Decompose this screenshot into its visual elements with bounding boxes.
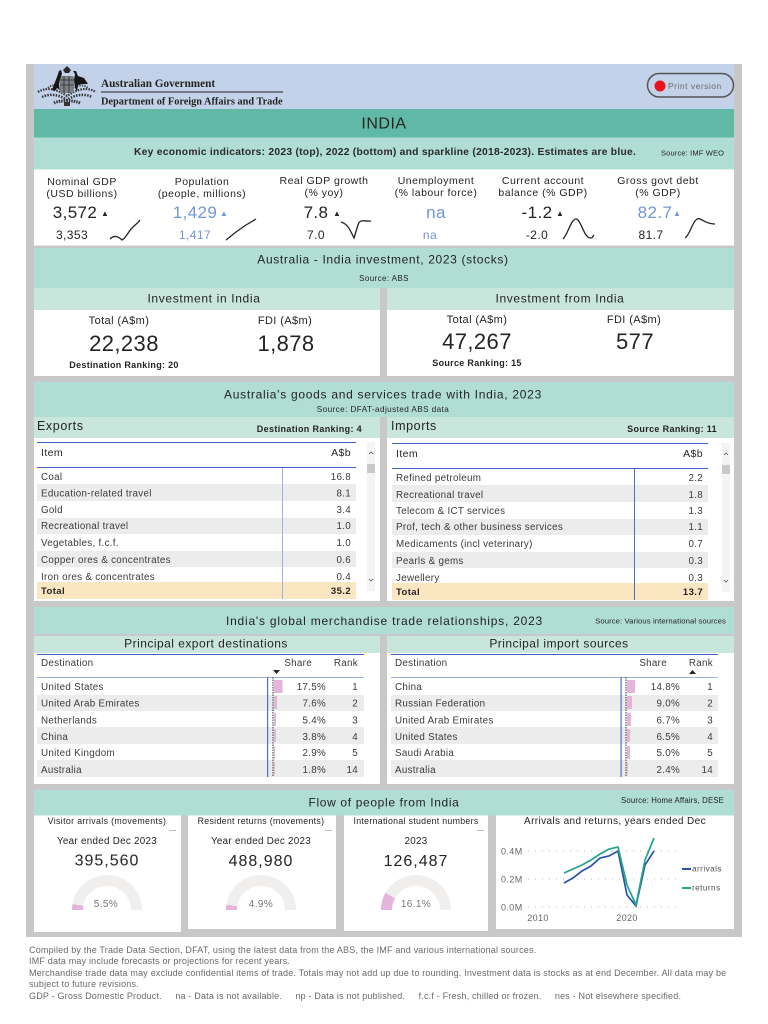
gauge: 4.9% [249, 899, 273, 910]
panel: imports: Medicaments (incl veterinary) [396, 539, 533, 550]
indicator: current account balance: -1.2 [522, 203, 552, 222]
panel: principal export destinations: 1 [352, 682, 358, 693]
card: international students [344, 816, 488, 931]
indicator: population: ▲ [220, 209, 228, 218]
panel: principal import sources: 9.0% [656, 698, 680, 710]
panel: principal export destinations: 3 [352, 716, 358, 726]
panel: principal import sources: Australia [395, 765, 436, 776]
header banner [34, 64, 734, 109]
panel: principal import sources: United States [395, 732, 458, 743]
indicator: gross govt debt: ▲ [673, 209, 681, 218]
panel: principal export destinations: United Arab Emirates [41, 698, 140, 710]
panel: imports: Prof, tech & other business services [396, 522, 563, 533]
card: resident returns: 488,980 [229, 853, 293, 870]
goods and services heading [34, 382, 734, 417]
panel: imports: 13.7 [683, 587, 703, 598]
footnotes: GDP - Gross Domestic Product. na - Data is not available. np - Data is not published. f.c.f - Fresh, chilled or frozen. nes - Not elsewhere specified. [29, 991, 681, 1001]
panel: exports: Gold [41, 505, 63, 516]
panel: principal import sources: 6.7% [656, 716, 680, 726]
indicator: population: (people, millions) [158, 188, 246, 200]
panel: investment in India: Investment in India [147, 292, 261, 306]
panel: investment in India [34, 288, 380, 376]
merchandise trade heading [34, 607, 734, 634]
panel: principal import sources [387, 636, 734, 784]
panel: imports: 1.1 [688, 522, 703, 533]
panel: arrivals and returns line chart [496, 816, 734, 929]
panel: investment in India: Total (A$m) [89, 315, 149, 327]
scrollbar [722, 443, 730, 592]
panel: imports [387, 417, 734, 601]
panel: principal export destinations: 17.5% [297, 682, 326, 693]
panel: principal export destinations: United States [41, 682, 104, 693]
indicator: unemployment [395, 175, 477, 242]
footnotes: Merchandise trade data may exclude confidential items of trade. Totals may not add up due to rounding. Investment data is stocks as at end December. All data may be [29, 968, 726, 978]
panel: investment from India: Investment from India [495, 292, 625, 306]
panel: arrivals and returns line chart: 0.4M [501, 846, 523, 856]
panel: principal import sources: 2 [707, 698, 713, 710]
panel: principal import sources: China [395, 682, 422, 693]
panel: principal import sources: Russian Federation [395, 698, 485, 710]
panel: exports: 3.4 [336, 505, 351, 516]
card: resident returns: Resident returns (movements) [198, 816, 324, 826]
line: arrivals [564, 851, 654, 906]
panel: exports: 16.8 [331, 472, 351, 483]
panel: key indicators [34, 170, 734, 246]
gauge [78, 880, 136, 910]
indicator: real GDP growth: (% yoy) [304, 187, 344, 199]
panel: principal export destinations: 3.8% [302, 732, 326, 743]
panel: principal import sources: 4 [707, 732, 713, 743]
panel: principal export destinations [34, 636, 380, 784]
panel: imports: Jewellery [396, 573, 440, 584]
panel: principal import sources: 2.4% [656, 765, 680, 776]
key indicators heading: Key economic indicators: 2023 (top), 2022 (bottom) and sparkline (2018-2023). Estimates are blue. [134, 147, 636, 158]
indicator: gross govt debt: Gross govt debt [617, 175, 699, 187]
page background panel [26, 64, 742, 937]
panel: investment from India: 577 [616, 329, 654, 354]
indicator: real GDP growth: 7.8 [304, 203, 328, 222]
key indicators heading [34, 138, 734, 170]
merchandise trade heading: Source: Various international sources [595, 616, 726, 626]
panel: principal export destinations: Netherlands [41, 716, 97, 726]
indicator: nominal GDP [46, 176, 140, 242]
department name: Australian Government [101, 78, 215, 90]
flow of people heading: Flow of people from India [308, 796, 460, 810]
panel: principal export destinations: 5.4% [302, 716, 326, 726]
indicator: nominal GDP: Nominal GDP [47, 176, 117, 188]
footnotes: Compiled by the Trade Data Section, DFAT, using the latest data from the ABS, the IMF and various international sources. [29, 945, 536, 955]
panel: exports: 1.0 [336, 538, 351, 549]
panel: exports: 1.0 [336, 521, 351, 532]
panel: principal import sources: 14 [702, 765, 713, 776]
panel: imports: Pearls & gems [396, 556, 464, 567]
panel: principal export destinations: Share [284, 658, 312, 669]
panel: exports: Recreational travel [41, 521, 128, 532]
footnotes: IMF data may include forecasts or projections for recent years. [29, 956, 290, 966]
flow of people heading [34, 790, 734, 816]
investment heading: Source: ABS [359, 274, 409, 283]
print version button: Print version [668, 81, 722, 91]
gauge: 5.5% [94, 899, 118, 910]
investment heading: Australia - India investment, 2023 (stocks) [257, 252, 509, 266]
indicator: nominal GDP: ▲ [101, 209, 109, 218]
panel: arrivals and returns line chart: 2010 [527, 913, 549, 923]
title: India [34, 109, 734, 138]
card: visitor arrivals: 395,560 [75, 852, 139, 870]
footnotes [29, 945, 726, 1001]
panel: imports: 0.7 [688, 539, 703, 550]
share bars [620, 677, 635, 777]
panel: principal export destinations: 2 [352, 698, 358, 710]
indicator: nominal GDP: 3,572 [53, 203, 97, 222]
panel: exports: Item [41, 447, 63, 459]
indicator: current account balance: balance (% GDP) [498, 187, 588, 199]
department name [101, 78, 283, 108]
panel: exports: 35.2 [331, 586, 351, 597]
panel: principal import sources: 5.0% [656, 748, 680, 759]
share bars [267, 677, 282, 777]
panel: imports: A$b [683, 448, 703, 460]
card: resident returns [188, 816, 336, 929]
panel: imports: Refined petroleum [396, 473, 481, 484]
goods and services heading: Source: DFAT-adjusted ABS data [317, 405, 449, 414]
indicator: gross govt debt: 81.7 [639, 228, 663, 242]
panel: principal export destinations: 1.8% [302, 765, 326, 776]
panel: principal import sources: Destination [395, 658, 447, 669]
card: international students: 126,487 [384, 853, 448, 870]
panel: principal export destinations: Australia [41, 765, 82, 776]
gauge [386, 880, 446, 910]
indicator: population [158, 176, 256, 242]
panel: principal export destinations: Rank [334, 658, 358, 669]
panel: investment in India: Destination Ranking: 20 [69, 360, 179, 370]
panel: arrivals and returns line chart: Arrivals and returns, years ended Dec [524, 816, 706, 827]
indicator: unemployment: na [426, 203, 446, 222]
panel: principal import sources: United Arab Emirates [395, 716, 494, 726]
panel: investment in India: 1,878 [257, 331, 315, 356]
panel: investment from India [387, 288, 734, 376]
indicator: current account balance: Current account [502, 175, 584, 187]
panel: principal import sources: Principal import sources [489, 636, 629, 650]
merchandise trade heading: India's global merchandise trade relationships, 2023 [226, 614, 543, 628]
panel: exports: 0.4 [336, 572, 351, 583]
gauge: 16.1% [401, 899, 431, 910]
panel: exports: Destination Ranking: 4 [257, 424, 362, 434]
panel: exports: Education-related travel [41, 488, 152, 500]
panel: investment from India: FDI (A$m) [607, 314, 661, 326]
card: visitor arrivals: Year ended Dec 2023 [57, 836, 157, 847]
indicator: current account balance: ▲ [556, 209, 564, 218]
panel: exports: 8.1 [336, 488, 351, 500]
panel: principal import sources: 1 [707, 682, 713, 693]
indicator: real GDP growth: ▲ [333, 209, 341, 218]
indicator: nominal GDP: (USD billions) [46, 188, 118, 200]
panel: principal import sources: 14.8% [651, 682, 680, 693]
indicator: population: Population [175, 176, 229, 188]
legend: arrivals [692, 864, 722, 874]
panel: imports: 0.3 [688, 573, 703, 584]
panel: investment in India: FDI (A$m) [258, 315, 312, 327]
indicator: real GDP growth: Real GDP growth [279, 175, 369, 187]
indicator: unemployment: na [423, 228, 437, 242]
panel: imports: Item [396, 448, 418, 460]
panel: exports: 0.6 [336, 555, 351, 566]
indicator: real GDP growth [279, 175, 371, 242]
key indicators heading: Source: IMF WEO [661, 148, 724, 158]
card: resident returns: Year ended Dec 2023 [211, 836, 311, 847]
panel: investment in India: 22,238 [89, 331, 159, 356]
panel: imports: Source Ranking: 11 [627, 424, 717, 434]
panel: principal export destinations: 5 [352, 748, 358, 759]
indicator: gross govt debt: 82.7 [638, 203, 672, 222]
panel: exports: Vegetables, f.c.f. [41, 538, 119, 549]
gauge [232, 880, 290, 910]
panel: exports: Total [41, 586, 65, 597]
footnotes: subject to future revisions. [29, 979, 139, 989]
investment heading [34, 248, 734, 288]
indicator: population: 1,429 [173, 203, 217, 222]
panel: principal import sources: 6.5% [656, 732, 680, 743]
flow of people heading: Source: Home Affairs, DESE [621, 796, 724, 805]
panel: exports: A$b [331, 447, 351, 459]
department name: Department of Foreign Affairs and Trade [101, 96, 283, 108]
scrollbar [367, 442, 375, 591]
panel: imports: Telecom & ICT services [396, 506, 505, 517]
indicator: current account balance [498, 175, 594, 242]
panel: arrivals and returns line chart: 0.0M [501, 902, 523, 912]
indicator: unemployment: Unemployment [398, 175, 474, 187]
panel: exports: Coal [41, 472, 62, 483]
panel: investment from India: Source Ranking: 15 [432, 358, 522, 368]
panel: principal export destinations: 7.6% [302, 698, 326, 710]
panel: principal export destinations: United Kingdom [41, 748, 115, 759]
panel: imports: 1.3 [688, 506, 703, 517]
panel: principal export destinations: Destination [41, 658, 93, 669]
panel: arrivals and returns line chart: 2020 [616, 913, 638, 923]
panel: principal export destinations: China [41, 732, 68, 743]
panel: imports: 0.3 [688, 556, 703, 567]
panel: investment from India: Total (A$m) [447, 314, 507, 326]
indicator: nominal GDP: 3,353 [56, 228, 88, 242]
line: returns [564, 838, 654, 905]
legend: returns [692, 882, 721, 892]
panel: imports: Recreational travel [396, 490, 483, 501]
indicator: gross govt debt [617, 175, 715, 242]
panel: principal import sources: Saudi Arabia [395, 748, 454, 759]
panel: exports: Copper ores & concentrates [41, 555, 171, 566]
panel: imports: 1.8 [688, 490, 703, 501]
panel: principal export destinations: 2.9% [302, 748, 326, 759]
panel: imports: Imports [391, 419, 437, 433]
panel: exports: Iron ores & concentrates [41, 572, 155, 583]
panel: arrivals and returns line chart: 0.2M [501, 874, 523, 884]
panel: principal import sources: 3 [707, 716, 713, 726]
title: India: INDIA [361, 116, 407, 132]
icon: coat of arms [38, 66, 96, 106]
panel: principal import sources: Rank [689, 658, 713, 669]
goods and services heading: Australia's goods and services trade with India, 2023 [224, 388, 542, 402]
panel: imports: 2.2 [688, 473, 703, 484]
panel: investment from India: 47,267 [442, 329, 512, 354]
panel: principal import sources: 5 [707, 748, 713, 759]
indicator: real GDP growth: 7.0 [307, 228, 325, 242]
panel: exports: Exports [37, 419, 84, 433]
card: international students: International student numbers [353, 816, 479, 826]
card: international students: 2023 [404, 836, 428, 847]
indicator: gross govt debt: (% GDP) [635, 187, 681, 199]
panel: principal export destinations: Principal export destinations [124, 636, 288, 650]
card: visitor arrivals [34, 816, 181, 932]
panel: principal export destinations: 4 [352, 732, 358, 743]
panel: principal import sources: Share [639, 658, 667, 669]
legend [682, 864, 722, 892]
indicator: population: 1,417 [179, 228, 211, 242]
card: visitor arrivals: Visitor arrivals (movements) [48, 816, 166, 826]
panel: exports [34, 417, 380, 601]
print version button [648, 74, 734, 97]
indicator: current account balance: -2.0 [526, 228, 548, 242]
panel: principal export destinations: 14 [346, 765, 358, 776]
panel: imports: Total [396, 587, 420, 598]
indicator: unemployment: (% labour force) [395, 187, 477, 199]
